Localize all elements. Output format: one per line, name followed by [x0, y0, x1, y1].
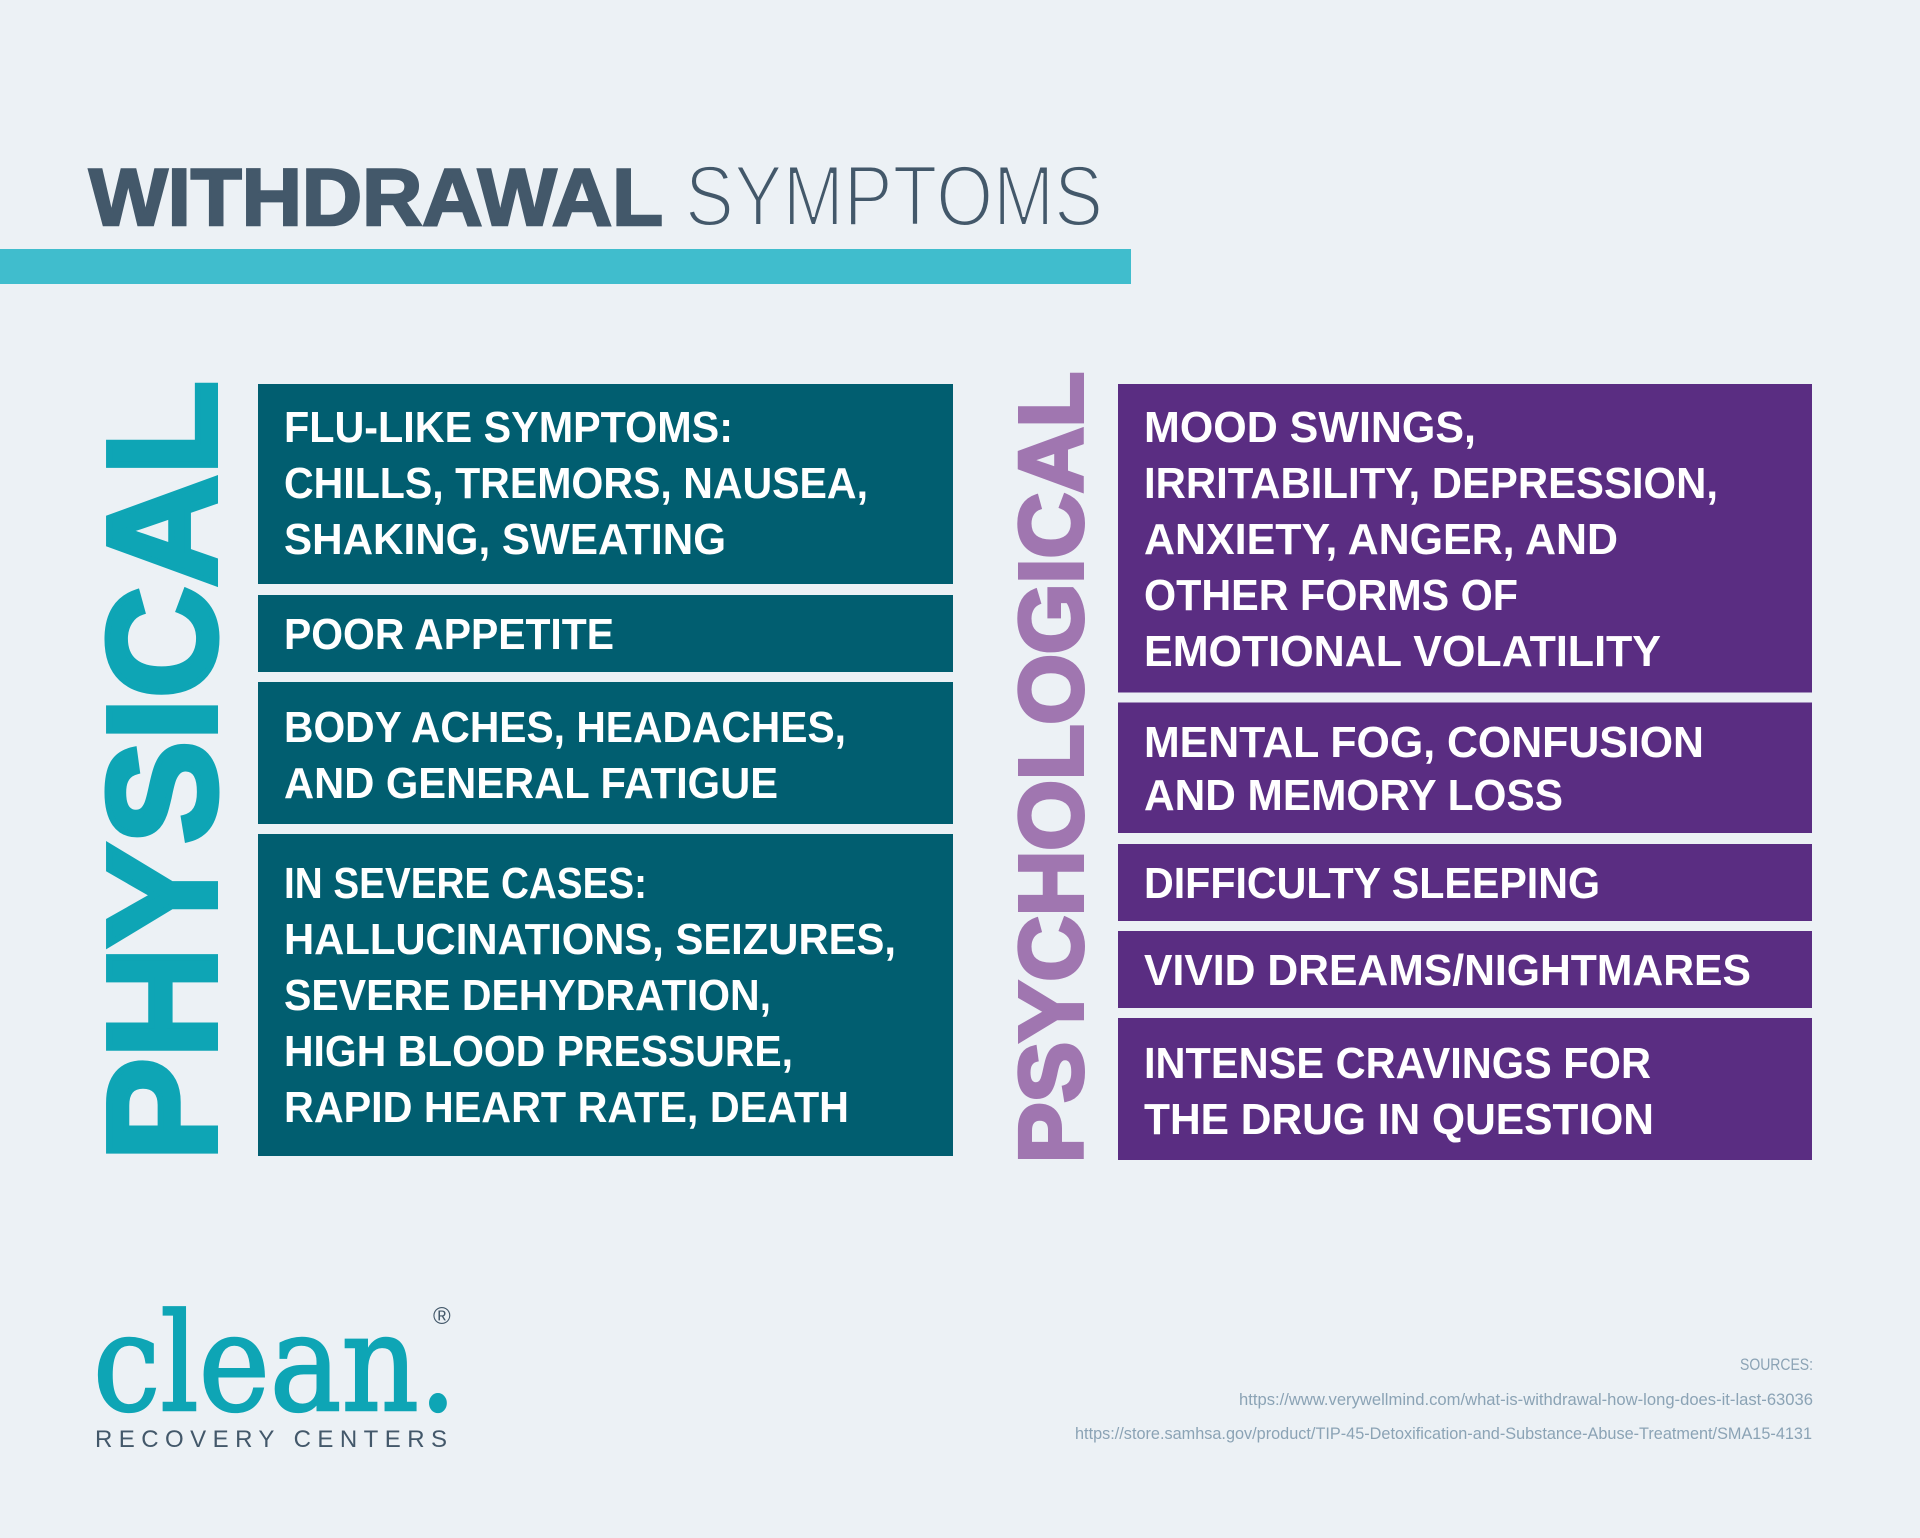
box: flu-like symptoms: CHILLS, TREMORS, NAUSEA,: [284, 460, 868, 508]
panel: psychological symptoms: [1118, 384, 1812, 1160]
title: SYMPTOMS: [685, 148, 1103, 244]
heading: physical: PHYSICAL: [76, 381, 248, 1161]
logo: clean recovery centers: RECOVERY CENTERS: [95, 1426, 447, 1453]
box: severe cases: RAPID HEART RATE, DEATH: [284, 1084, 849, 1132]
panel: physical symptoms: [258, 384, 953, 1156]
box: poor appetite: [258, 595, 953, 672]
box: mental fog: AND MEMORY LOSS: [1144, 772, 1563, 820]
box: body aches: BODY ACHES, HEADACHES,: [284, 704, 846, 752]
box: severe cases: IN SEVERE CASES:: [284, 860, 647, 908]
box: severe cases: HIGH BLOOD PRESSURE,: [284, 1028, 793, 1076]
box: mental fog: [1118, 702, 1812, 833]
box: vivid dreams: VIVID DREAMS/NIGHTMARES: [1144, 947, 1751, 995]
box: mood swings: ANXIETY, ANGER, AND: [1144, 516, 1618, 564]
box: severe cases: [258, 834, 953, 1156]
sources: SOURCES:: [1740, 1355, 1813, 1374]
box: intense cravings: INTENSE CRAVINGS FOR: [1144, 1040, 1651, 1088]
box: poor appetite: POOR APPETITE: [284, 611, 614, 659]
title: WITHDRAWAL: [89, 153, 663, 243]
title: [89, 148, 1103, 244]
box: mood swings: [1118, 384, 1812, 692]
box: mood swings: EMOTIONAL VOLATILITY: [1144, 628, 1661, 676]
sources: [1075, 1355, 1813, 1443]
box: body aches: [258, 682, 953, 824]
logo: clean recovery centers: clean.: [93, 1285, 457, 1442]
box: flu-like symptoms: SHAKING, SWEATING: [284, 516, 726, 564]
box: difficulty sleeping: [1118, 844, 1812, 921]
box: vivid dreams: [1118, 931, 1812, 1008]
sources: https://store.samhsa.gov/product/TIP-45-Detoxification-and-Substance-Abuse-Treatment/SMA15-4131: [1075, 1424, 1812, 1443]
box: body aches: AND GENERAL FATIGUE: [284, 760, 778, 808]
box: flu-like symptoms: [258, 384, 953, 584]
box: severe cases: HALLUCINATIONS, SEIZURES,: [284, 916, 896, 964]
heading: psychological: PSYCHOLOGICAL: [1002, 372, 1102, 1163]
logo: clean recovery centers: ®: [433, 1303, 451, 1330]
title underline band: [0, 249, 1131, 284]
box: mood swings: IRRITABILITY, DEPRESSION,: [1144, 460, 1718, 508]
box: severe cases: SEVERE DEHYDRATION,: [284, 972, 771, 1020]
box: mood swings: MOOD SWINGS,: [1144, 404, 1476, 452]
sources: https://www.verywellmind.com/what-is-withdrawal-how-long-does-it-last-63036: [1239, 1390, 1813, 1409]
box: mood swings: OTHER FORMS OF: [1144, 572, 1518, 620]
box: intense cravings: THE DRUG IN QUESTION: [1144, 1096, 1654, 1144]
box: flu-like symptoms: FLU-LIKE SYMPTOMS:: [284, 404, 733, 452]
box: intense cravings: [1118, 1018, 1812, 1160]
box: mental fog: MENTAL FOG, CONFUSION: [1144, 719, 1704, 767]
box: difficulty sleeping: DIFFICULTY SLEEPING: [1144, 860, 1600, 908]
